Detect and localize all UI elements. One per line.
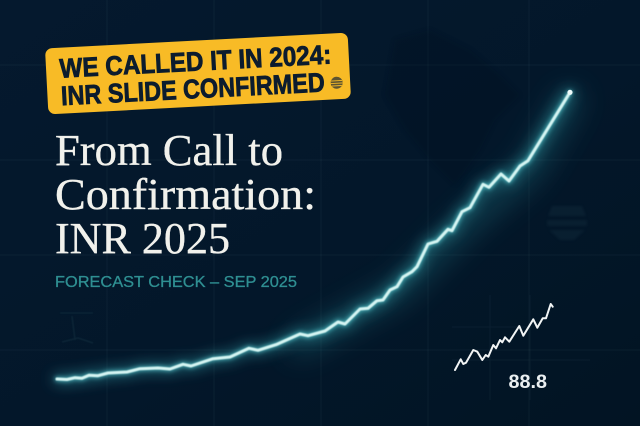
title (55, 126, 316, 263)
yellow badge (45, 33, 351, 114)
subtitle: FORECAST CHECK – SEP 2025 (55, 274, 297, 291)
badge text line 1: WE CALLED IT IN 2024: (59, 40, 332, 84)
badge text line 2: INR SLIDE CONFIRMED (60, 67, 325, 111)
faint map silhouette (385, 30, 520, 185)
title: From Call to (55, 126, 283, 175)
main rising line chart (57, 90, 573, 379)
title: INR 2025 (55, 214, 230, 263)
title: Confirmation: (55, 170, 316, 219)
icon: striped coin (330, 76, 343, 89)
inset value: 88.8 (508, 372, 547, 393)
faint coin icon (547, 206, 587, 240)
inset sparkline (452, 295, 590, 400)
faint rupee-like glyph (60, 313, 93, 343)
